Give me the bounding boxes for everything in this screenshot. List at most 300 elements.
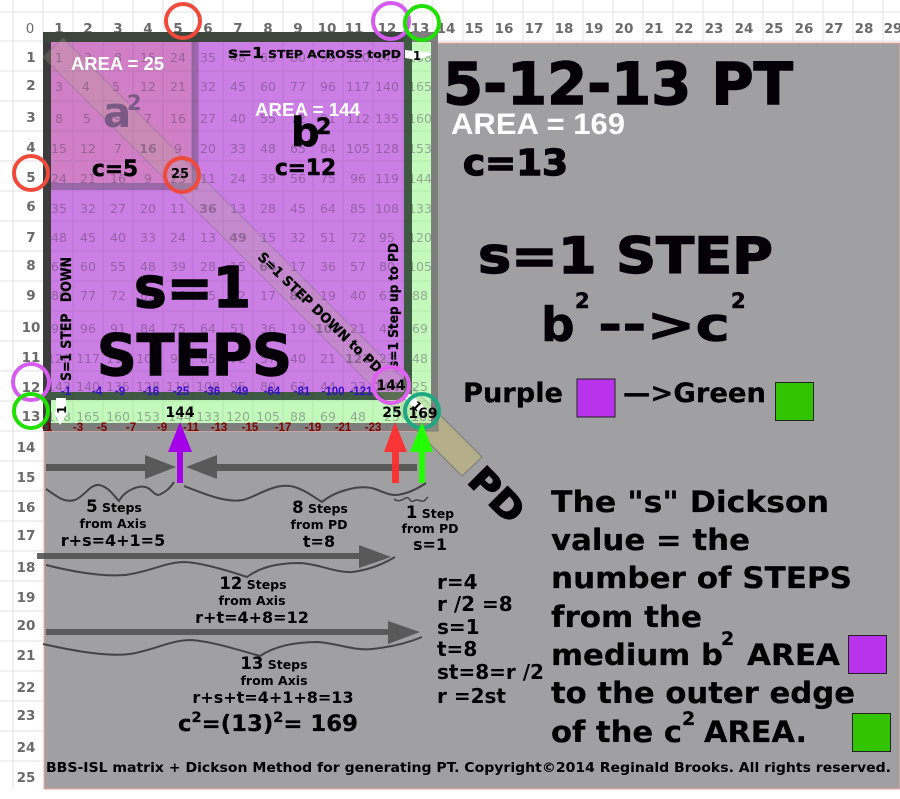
matrix cell values: 15	[140, 50, 156, 65]
column header numbers: 11	[345, 21, 363, 37]
circled values: 25	[382, 405, 402, 421]
column header numbers: 6	[203, 21, 213, 37]
c squared equation: 2	[192, 710, 202, 726]
explanation paragraph: medium b	[551, 638, 723, 672]
explanation paragraph: AREA.	[704, 715, 807, 749]
caption: 1 step: 1 Step	[406, 503, 454, 522]
row header numbers: 15	[17, 470, 35, 486]
arrow row 18	[37, 545, 391, 568]
matrix cell values: 24	[170, 230, 186, 245]
row header numbers: 9	[26, 288, 36, 304]
dark red negative values row: -3	[73, 422, 83, 434]
caption: 8 steps	[290, 498, 348, 551]
diagonal step down label: S=1 STEP DOWN to PD	[254, 249, 385, 376]
explanation paragraph: to the outer edge	[551, 676, 855, 710]
c squared equation: c	[178, 712, 191, 737]
formula list: r /2 =8	[437, 592, 513, 616]
matrix cell values: 80	[260, 379, 276, 394]
matrix cell values: 75	[170, 321, 186, 336]
column header numbers	[26, 21, 900, 37]
column header numbers: 18	[555, 21, 573, 37]
matrix cell values: 85	[350, 201, 366, 216]
matrix cell values: 3	[84, 50, 92, 65]
formula list: st=8=r /2	[437, 660, 544, 684]
matrix cell values: 100	[315, 321, 341, 336]
explanation paragraph: The "s" Dickson	[551, 485, 829, 519]
matrix cell values: 40	[350, 288, 366, 303]
matrix cell values: 25	[384, 409, 400, 424]
matrix cell values: 140	[76, 379, 100, 394]
matrix cell values: 91	[320, 111, 336, 126]
matrix cell values: 16	[170, 111, 186, 126]
matrix cell values: 65	[290, 141, 306, 156]
matrix cell values: 32	[80, 201, 96, 216]
matrix cell values: 5	[83, 111, 91, 126]
row header numbers: 6	[26, 199, 36, 215]
matrix cell values: 153	[136, 409, 160, 424]
row header numbers: 24	[17, 740, 35, 756]
matrix cell values: 80	[290, 50, 306, 65]
matrix cell values: 27	[200, 111, 216, 126]
matrix cell values: 88	[290, 409, 306, 424]
matrix cell values: 25	[412, 379, 428, 394]
matrix cell values: 32	[290, 230, 306, 245]
matrix cell values: 35	[51, 201, 67, 216]
matrix cell values: 64	[320, 201, 336, 216]
big s=1 heading: s=1	[134, 256, 251, 321]
column header numbers: 9	[293, 21, 303, 37]
blue negative values row	[61, 386, 373, 398]
arrow row 20	[46, 621, 420, 644]
matrix cell values: 160	[106, 409, 130, 424]
caption: 13 steps: from Axis	[240, 673, 308, 688]
b squared to c squared	[541, 289, 746, 353]
dark red negative values row: -5	[97, 422, 108, 434]
c=12 label: c=12	[275, 156, 336, 181]
matrix cell values: 95	[230, 379, 246, 394]
caption: 12 steps: from Axis	[218, 593, 286, 608]
matrix cell values: 15	[51, 141, 67, 156]
matrix cell values: 96	[350, 171, 366, 186]
matrix cell values: 96	[320, 79, 336, 94]
c=5 label: c=5	[92, 157, 138, 182]
matrix cell values: 143	[47, 379, 71, 394]
curly braces	[43, 482, 428, 656]
matrix cell values: 60	[260, 79, 276, 94]
matrix cell values: 88	[412, 288, 428, 303]
matrix cell values: 36	[260, 321, 276, 336]
matrix cell values: 45	[200, 288, 216, 303]
matrix squares	[43, 32, 438, 431]
white arrow down: 1	[55, 406, 69, 414]
blue negative values row: -25	[173, 386, 190, 398]
matrix cell values: 8	[55, 111, 63, 126]
s=1 step heading: s=1 STEP	[478, 227, 773, 285]
matrix cell values: 133	[408, 201, 432, 216]
caption: 13 steps	[192, 654, 354, 707]
row header numbers: 11	[22, 350, 40, 366]
caption: 1 step: from PD	[401, 521, 459, 536]
row header numbers: 16	[17, 500, 35, 516]
row header numbers: 12	[22, 380, 40, 396]
row header numbers: 18	[17, 560, 35, 576]
matrix cell values: 99	[51, 321, 67, 336]
matrix cell values: 63	[260, 50, 276, 65]
matrix cell values: 96	[80, 321, 96, 336]
column header numbers: 20	[615, 21, 633, 37]
c=13 label: c=13	[463, 143, 568, 184]
column header numbers: 12	[378, 21, 396, 37]
matrix cell values: 135	[375, 111, 399, 126]
formula list: t=8	[437, 637, 477, 661]
matrix cell values: 112	[346, 111, 370, 126]
column header numbers: 0	[26, 21, 34, 37]
area 144 label: AREA = 144	[255, 100, 360, 120]
circled values: 144	[165, 405, 195, 421]
diagonal PD band	[43, 38, 482, 476]
matrix cell values: 20	[140, 201, 156, 216]
white arrow down	[54, 398, 69, 425]
row header numbers: 7	[26, 230, 36, 246]
matrix cell values: 44	[320, 379, 336, 394]
matrix cell values: 27	[110, 201, 126, 216]
vertical step up label: s=1 Step up to PD	[386, 243, 402, 368]
column header numbers: 16	[495, 21, 513, 37]
column header numbers: 24	[735, 21, 753, 37]
column header numbers: 1	[54, 21, 64, 37]
matrix cell values: 33	[230, 141, 246, 156]
matrix cell values: 108	[375, 201, 399, 216]
b squared label: 2	[316, 115, 331, 140]
caption: 13 steps: 13 Steps	[240, 654, 308, 673]
big STEPS heading: STEPS	[97, 323, 292, 389]
blue negative values row: -81	[294, 386, 311, 398]
dark red negative values row	[42, 422, 381, 434]
PD label: PD	[460, 459, 532, 532]
matrix cell values: 25	[170, 171, 186, 186]
c squared equation: 2	[273, 710, 283, 726]
matrix cell values: 153	[408, 141, 432, 156]
matrix cell values: 165	[408, 79, 432, 94]
formula list: r=4	[437, 570, 478, 594]
dark red negative values row: -21	[335, 422, 352, 434]
white arrow across: 1	[413, 49, 421, 63]
matrix cell values: 21	[170, 79, 186, 94]
dark red negative values row: -7	[126, 422, 136, 434]
caption: 8 steps: 8 Steps	[292, 498, 348, 517]
matrix cell values: 48	[230, 50, 246, 65]
matrix cell values: 105	[346, 141, 370, 156]
matrix cell values: 120	[346, 50, 370, 65]
matrix cell values: 23	[379, 351, 395, 366]
row header numbers: 20	[17, 618, 35, 634]
matrix cell values: 55	[260, 111, 276, 126]
dark red negative values row: -17	[275, 422, 291, 434]
row header numbers: 3	[26, 110, 36, 126]
matrix cell values: 144	[168, 409, 192, 424]
row header numbers: 23	[17, 708, 35, 724]
matrix cell values: 91	[110, 321, 126, 336]
matrix cell values: 39	[170, 259, 186, 274]
matrix cell values: 49	[229, 230, 247, 245]
column header numbers: 22	[675, 21, 693, 37]
matrix cell values: 144	[374, 379, 400, 394]
matrix cell values: 169	[411, 409, 435, 424]
matrix cell values: 11	[200, 171, 216, 186]
caption: 12 steps	[195, 574, 309, 627]
explanation paragraph: from the	[551, 600, 702, 634]
matrix cell values: 48	[140, 259, 156, 274]
matrix cell values: 117	[346, 79, 370, 94]
matrix cell values: 165	[76, 409, 100, 424]
green legend: —>Green	[623, 378, 766, 409]
matrix cell values: 128	[136, 379, 160, 394]
matrix cell values: 57	[350, 259, 366, 274]
matrix cell values: 63	[51, 259, 67, 274]
matrix cell values: 144	[408, 171, 432, 186]
row header numbers: 22	[17, 680, 35, 696]
matrix cell values: 77	[290, 79, 306, 94]
matrix cell values: 105	[408, 259, 432, 274]
column header numbers: 7	[233, 21, 243, 37]
column header numbers: 8	[263, 21, 273, 37]
matrix cell values: 4	[82, 79, 90, 94]
column header numbers: 27	[825, 21, 843, 37]
white arrow across	[405, 49, 431, 63]
row header numbers: 4	[26, 140, 36, 156]
marker circles	[13, 3, 439, 428]
row header numbers	[17, 50, 40, 786]
matrix cell values: 36	[320, 259, 336, 274]
b squared to c squared: b	[541, 298, 575, 353]
row header numbers: 25	[17, 770, 35, 786]
matrix cell values: 24	[51, 171, 67, 186]
matrix cell values: 72	[290, 111, 306, 126]
explanation paragraph: value = the	[551, 523, 750, 557]
matrix cell values: 140	[375, 79, 399, 94]
column header numbers: 25	[765, 21, 783, 37]
area 25 label: AREA = 25	[71, 54, 164, 74]
red arrow	[384, 422, 407, 483]
b squared label: b	[291, 110, 320, 156]
column header numbers: 19	[585, 21, 603, 37]
matrix cell values: 105	[136, 351, 160, 366]
matrix cell values: 9	[114, 111, 122, 126]
matrix cell values: 9	[144, 171, 152, 186]
matrix cell values: 64	[259, 259, 277, 274]
blue negative values row: -36	[204, 386, 220, 398]
matrix cell values: 120	[47, 351, 71, 366]
matrix cell values: 24	[230, 171, 246, 186]
explanation paragraph	[551, 485, 855, 749]
matrix cell values: 121	[345, 351, 371, 366]
column header numbers: 2	[83, 21, 93, 37]
caption: 5 steps: 5 Steps	[86, 497, 142, 516]
blue negative values row: -121	[349, 386, 373, 398]
row header numbers: 19	[17, 590, 35, 606]
formula list	[437, 570, 544, 708]
green square swatch	[852, 714, 890, 752]
matrix cell values: 28	[260, 201, 276, 216]
matrix cell values: 69	[412, 321, 428, 336]
blue negative values row: -100	[321, 386, 345, 398]
caption: 5 steps	[61, 497, 165, 550]
blue negative values row: -1	[61, 386, 72, 398]
column header numbers: 26	[795, 21, 813, 37]
matrix cell values: 32	[230, 288, 246, 303]
matrix cell values: 51	[320, 230, 336, 245]
blue negative values row: -64	[264, 386, 281, 398]
matrix cell values: 17	[290, 259, 306, 274]
caption: 1 step: s=1	[413, 535, 447, 554]
column header numbers: 28	[855, 21, 873, 37]
matrix cell values: 168	[47, 409, 71, 424]
matrix cell values: 28	[200, 259, 216, 274]
matrix cell values: 120	[226, 409, 250, 424]
column header numbers: 14	[437, 21, 455, 37]
column header numbers: 23	[705, 21, 723, 37]
matrix cell values: 63	[290, 379, 306, 394]
matrix cell values: 133	[196, 409, 220, 424]
matrix cell values: 36	[199, 201, 217, 216]
matrix cell values: 51	[230, 321, 246, 336]
dark red negative values row: -1	[42, 422, 53, 434]
matrix cell values: 77	[80, 288, 96, 303]
row header numbers: 17	[17, 528, 35, 544]
matrix cell values: 13	[230, 201, 246, 216]
matrix cell values: 32	[200, 79, 216, 94]
matrix cell values: 13	[200, 230, 216, 245]
matrix cell values: 69	[320, 409, 336, 424]
matrix cell values: 80	[51, 288, 67, 303]
row header numbers: 5	[26, 170, 36, 186]
matrix cell values: 1	[55, 50, 63, 65]
matrix cell values: 17	[260, 288, 276, 303]
matrix cell values: 16	[110, 171, 126, 186]
matrix cell values: 81	[289, 288, 307, 303]
column header numbers: 10	[318, 21, 336, 37]
matrix cell values: 72	[350, 230, 366, 245]
matrix cell values: 160	[408, 111, 432, 126]
purple legend: Purple	[463, 378, 563, 409]
matrix cell values: 105	[256, 409, 280, 424]
matrix cell values: 9	[174, 141, 182, 156]
formula list: s=1	[437, 615, 480, 639]
row header numbers: 1	[26, 50, 36, 66]
matrix cell values: 3	[55, 79, 63, 94]
row header numbers: 13	[22, 409, 40, 425]
matrix cell values: 40	[230, 111, 246, 126]
copyright footer: BBS-ISL matrix + Dickson Method for generating PT. Copyright©2014 Reginald Brooks. All rights reserved.	[46, 761, 891, 776]
matrix cell values: 95	[379, 230, 395, 245]
matrix cell values: 120	[408, 230, 432, 245]
matrix cell values: 75	[320, 171, 336, 186]
matrix cell values: 84	[140, 321, 156, 336]
dark red negative values row: -13	[211, 422, 227, 434]
matrix cell values: 21	[320, 351, 336, 366]
matrix cell values: 7	[114, 141, 122, 156]
matrix cell values: 33	[140, 230, 156, 245]
purple legend	[463, 378, 615, 417]
matrix cell values: 12	[80, 141, 96, 156]
explanation paragraph: of the c	[551, 715, 682, 749]
matrix cell values: 45	[230, 79, 246, 94]
matrix cell values: 45	[290, 201, 306, 216]
caption: 13 steps: r+s+t=4+1+8=13	[192, 688, 354, 707]
matrix cell values: 5	[112, 79, 120, 94]
matrix cell values: 16	[139, 141, 157, 156]
purple square swatch	[848, 636, 886, 674]
column header numbers: 17	[525, 21, 543, 37]
title: 5-12-13 PT	[443, 50, 793, 118]
matrix cell values: 85	[200, 351, 216, 366]
matrix cell values: 99	[320, 50, 336, 65]
white arrow diagonal	[404, 394, 426, 414]
column header numbers: 5	[173, 21, 183, 37]
blue negative values row: -16	[143, 386, 159, 398]
horizontal arrows row 15	[46, 455, 417, 479]
matrix cell values: 80	[379, 259, 395, 274]
column header numbers: 21	[645, 21, 663, 37]
matrix cell values: 19	[290, 321, 306, 336]
a squared label: 2	[127, 91, 142, 115]
matrix cell values: 128	[375, 141, 399, 156]
matrix cell values: 12	[140, 79, 156, 94]
circled values: 25	[171, 167, 189, 182]
green arrow	[410, 422, 433, 483]
dark red negative values row: -23	[365, 422, 381, 434]
matrix cell values: 24	[170, 50, 186, 65]
matrix cell values: 55	[110, 259, 126, 274]
caption: 12 steps: 12 Steps	[219, 574, 287, 593]
green legend	[623, 378, 814, 420]
matrix cell values: 11	[170, 201, 186, 216]
matrix cell values: 72	[230, 351, 246, 366]
matrix cell values: 23	[350, 379, 366, 394]
row header numbers: 2	[26, 78, 36, 94]
matrix cell values: 20	[200, 141, 216, 156]
matrix cell values: 60	[80, 259, 96, 274]
row header numbers: 21	[17, 648, 35, 664]
matrix cell values: 48	[51, 230, 67, 245]
matrix cell values: 8	[114, 50, 122, 65]
matrix cell values: 7	[144, 111, 152, 126]
explanation paragraph: AREA	[747, 638, 840, 672]
white arrow diagonal: 1	[409, 398, 425, 414]
blue negative values row: -49	[232, 386, 248, 398]
column header numbers: 3	[113, 21, 123, 37]
matrix cell values: 57	[260, 351, 276, 366]
matrix cell values: 21	[80, 171, 96, 186]
matrix cell values: 108	[196, 379, 220, 394]
explanation paragraph: 2	[721, 628, 734, 650]
matrix cell values: 56	[290, 171, 306, 186]
matrix cell values: 15	[230, 259, 246, 274]
matrix cell values: 168	[408, 50, 432, 65]
column header numbers: 15	[465, 21, 483, 37]
area 169 label: AREA = 169	[451, 108, 625, 141]
circled values: 144	[376, 378, 406, 394]
matrix cell values: 40	[110, 230, 126, 245]
c squared equation: =(13)	[202, 712, 273, 737]
circled values	[165, 167, 438, 422]
b squared to c squared: 2	[731, 289, 746, 313]
matrix cell values: 84	[320, 141, 336, 156]
matrix cell values: 65	[140, 288, 156, 303]
explanation paragraph: 2	[682, 708, 695, 730]
matrix cell values: 63	[379, 288, 395, 303]
matrix cell values: 119	[375, 171, 399, 186]
